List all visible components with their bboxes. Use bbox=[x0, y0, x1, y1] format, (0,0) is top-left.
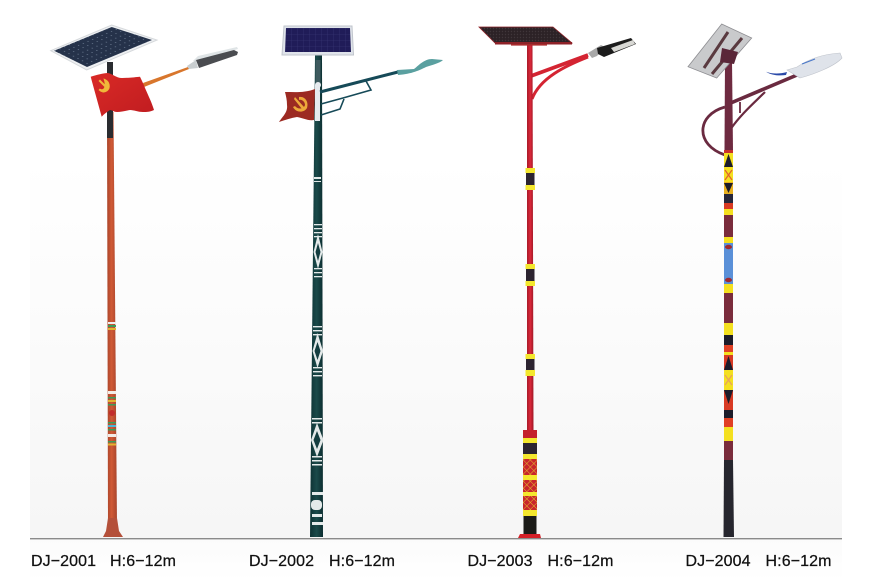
pole black foot bbox=[724, 460, 734, 537]
pole base bbox=[103, 518, 123, 537]
lamp arm bbox=[320, 72, 398, 115]
pole bbox=[527, 43, 534, 430]
pole decorative diamond bands bbox=[311, 177, 324, 525]
solar panel bbox=[282, 26, 354, 55]
flag bbox=[279, 89, 315, 122]
lamp head bbox=[397, 59, 443, 75]
lamp arm and brace bbox=[703, 75, 797, 155]
caption: DJ-2004: DJ−2004 bbox=[686, 553, 751, 570]
pole upper bbox=[724, 60, 733, 150]
background panel bbox=[30, 160, 842, 580]
decorated sleeve bbox=[523, 430, 537, 516]
street light: DJ-2004 bbox=[688, 24, 842, 537]
pole base bbox=[518, 534, 541, 538]
street light: DJ-2003 bbox=[479, 27, 636, 538]
ground line bbox=[30, 538, 842, 539]
lamp head bbox=[187, 47, 238, 69]
lamp head bbox=[766, 53, 842, 78]
caption: DJ-2004: H:6−12m bbox=[766, 553, 832, 570]
caption: DJ-2003: H:6−12m bbox=[548, 553, 614, 570]
street light: DJ-2002 bbox=[279, 26, 443, 537]
solar panel bbox=[51, 25, 157, 70]
caption: DJ-2002: DJ−2002 bbox=[249, 553, 314, 570]
pole bands bbox=[526, 168, 535, 376]
lamp head bbox=[588, 38, 636, 58]
solar panel bbox=[479, 27, 572, 46]
solar panel rear bbox=[688, 24, 752, 78]
street light: DJ-2001 bbox=[51, 25, 238, 537]
pole painted segments bbox=[724, 150, 733, 460]
pole bbox=[107, 62, 117, 525]
white collar bbox=[315, 60, 321, 121]
flag bbox=[91, 73, 154, 117]
hammer and sickle emblem bbox=[99, 79, 109, 92]
hammer and sickle emblem bbox=[293, 97, 308, 112]
caption: DJ-2003: DJ−2003 bbox=[468, 553, 533, 570]
pole bbox=[310, 55, 323, 537]
caption: DJ-2001: DJ−2001 bbox=[31, 553, 96, 570]
lamp arms bbox=[531, 55, 588, 99]
pole black foot bbox=[524, 516, 536, 535]
caption: DJ-2002: H:6−12m bbox=[329, 553, 395, 570]
pole decorative bands bbox=[108, 322, 116, 446]
caption: DJ-2001: H:6−12m bbox=[110, 553, 176, 570]
lamp arm bbox=[143, 67, 189, 87]
